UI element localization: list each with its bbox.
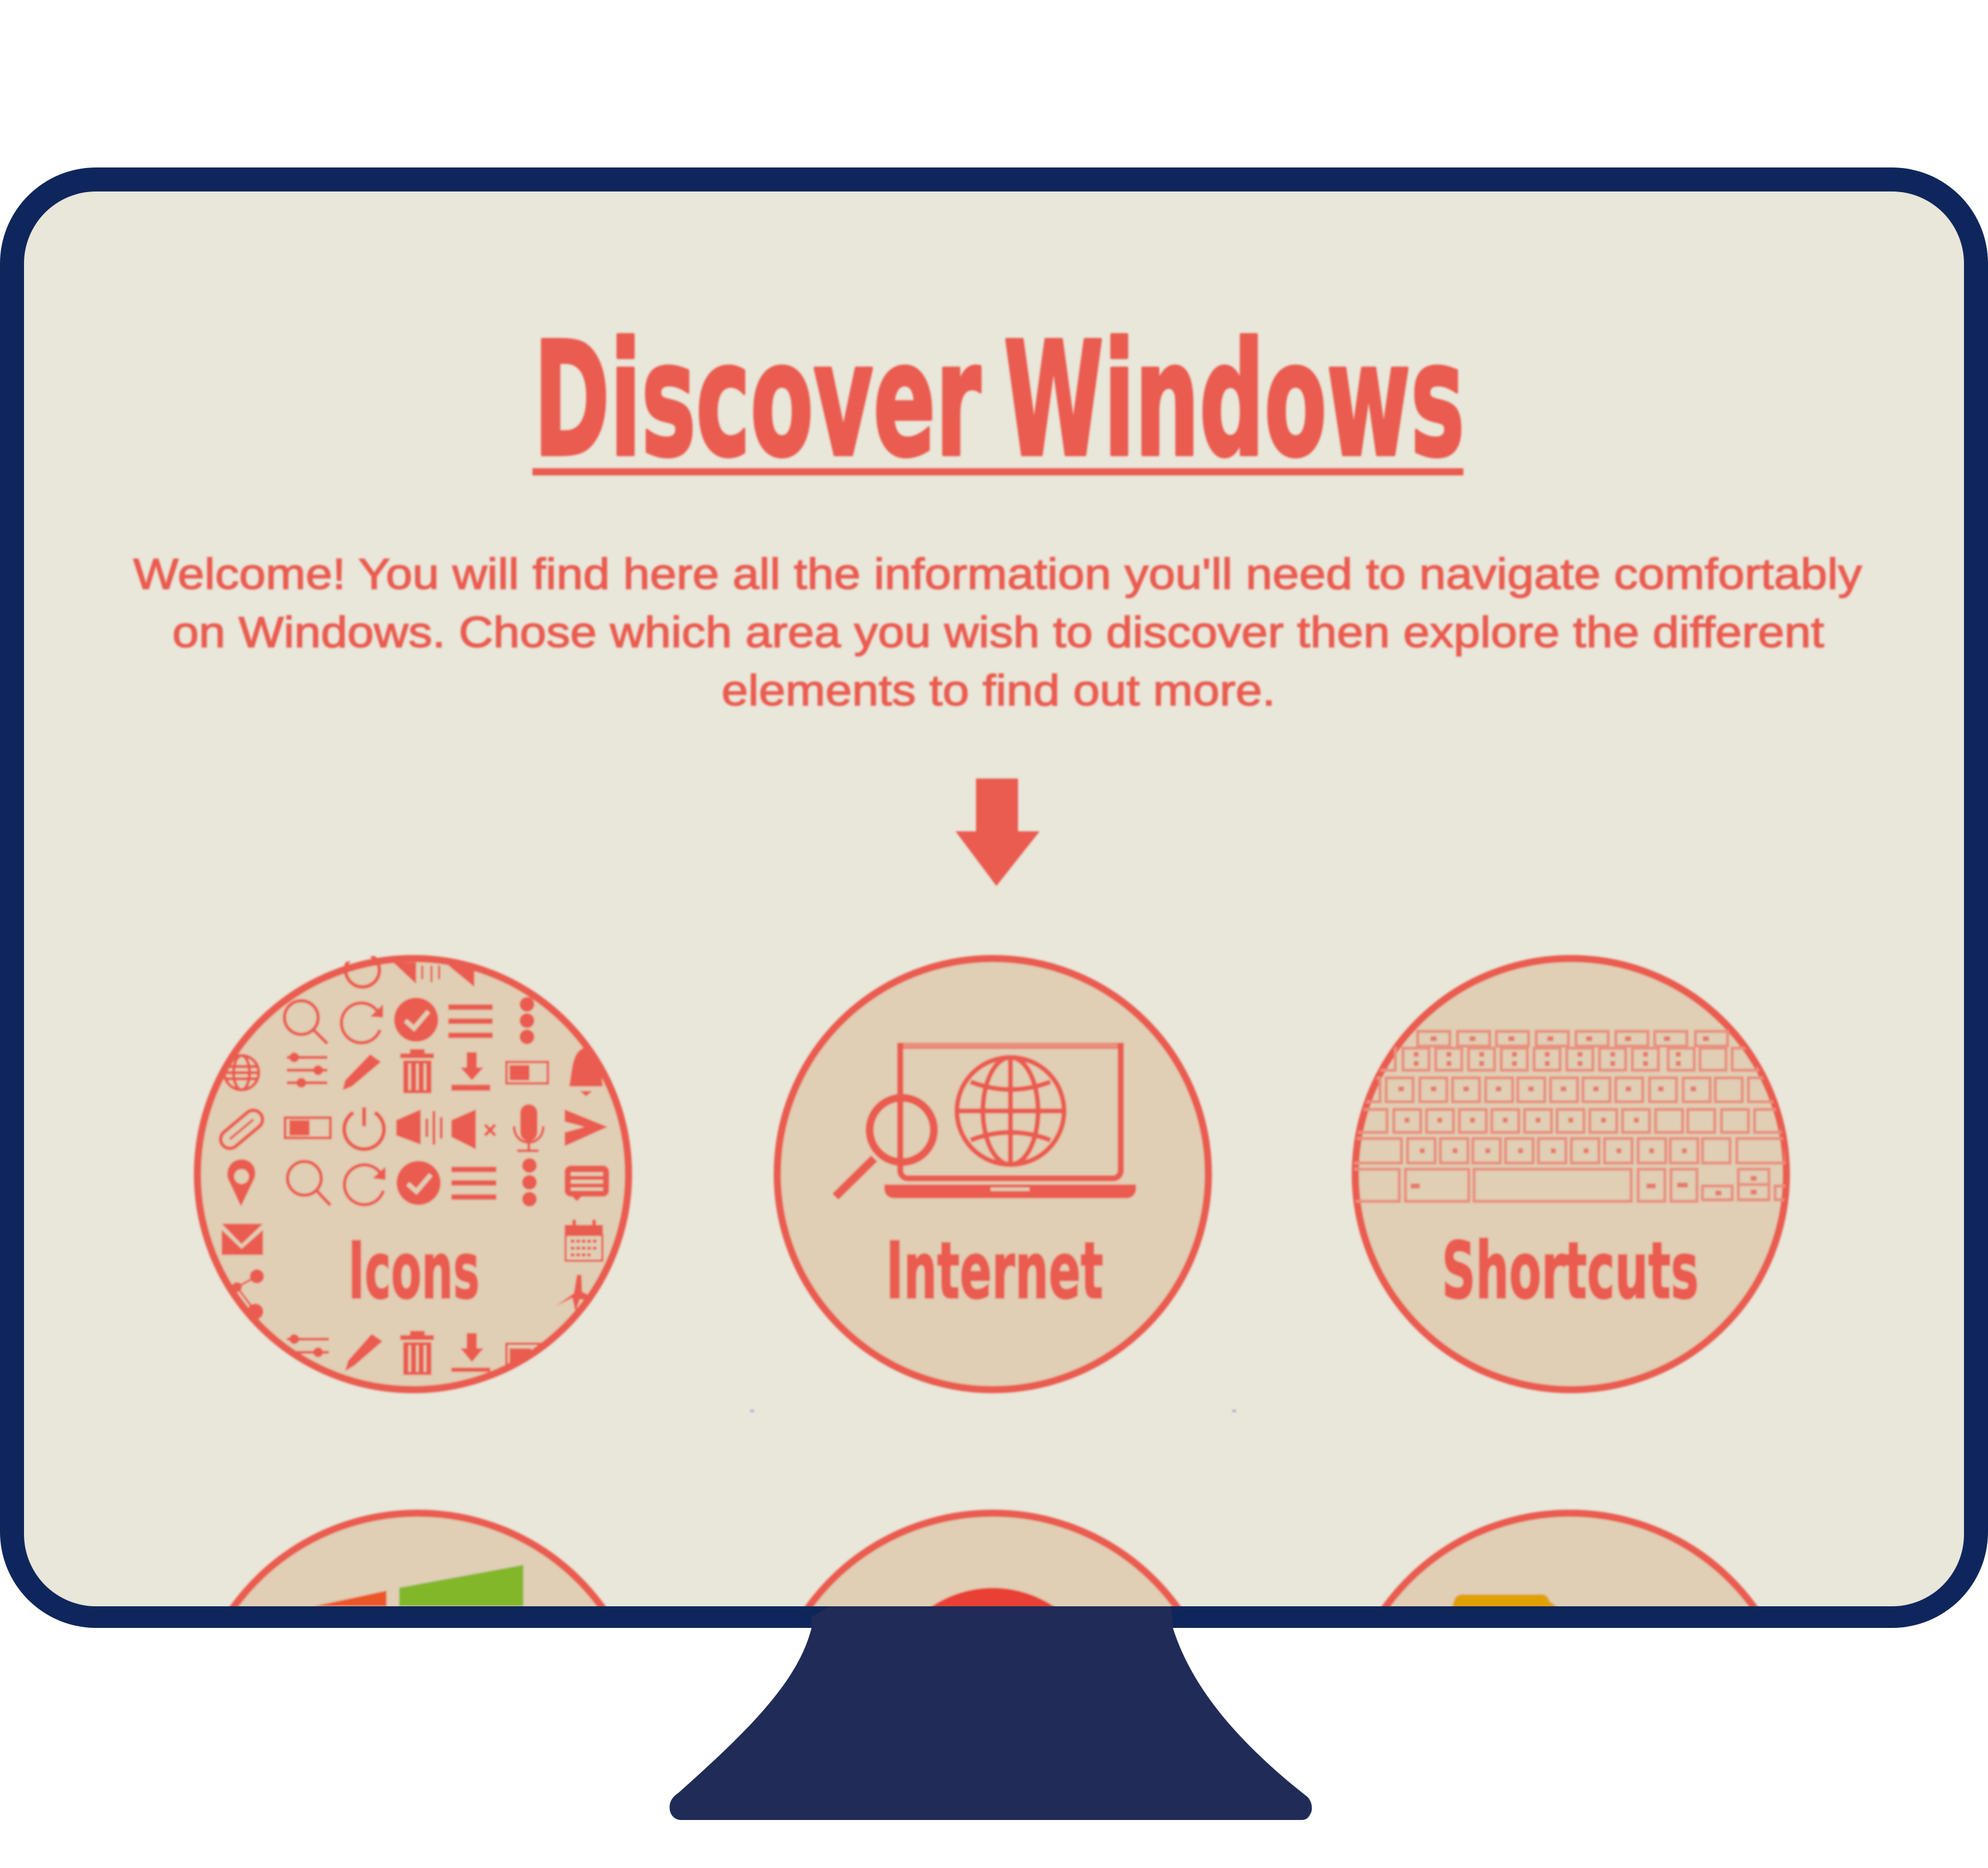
monitor frame [0, 167, 1988, 1628]
title: Discover [534, 309, 981, 492]
circle: icons [197, 953, 628, 1390]
icon: yellow shape [1451, 1594, 1559, 1609]
label: Internet: Internet [886, 1225, 1103, 1316]
circle: browser (clipped) [803, 1513, 1182, 1615]
stray marks [750, 1410, 1236, 1412]
circle: folder (clipped) [1381, 1513, 1759, 1615]
icon: red browser logo [921, 1588, 1065, 1615]
intro text: elements to find out more. [721, 667, 1276, 715]
title underline [532, 468, 1463, 475]
intro text: on Windows. Chose which area you wish to discover then explore the different [172, 609, 1824, 657]
circle: shortcuts [1351, 959, 1788, 1390]
circle: windows (clipped) [228, 1513, 607, 1615]
icon: laptop with globe and magnifier [833, 1043, 1136, 1200]
arrow pointing down [956, 779, 1040, 886]
intro text [133, 550, 1862, 715]
label: Shortcuts: Shortcuts [1442, 1225, 1699, 1316]
label: Icons: Icons [348, 1225, 480, 1316]
icon grid [217, 953, 609, 1375]
icon: windows logo [313, 1565, 523, 1606]
title [540, 331, 1463, 460]
icon: keyboard [1351, 1031, 1788, 1201]
monitor stand [670, 1606, 1312, 1820]
intro text: Welcome! You will find here all the information you'll need to navigate comfortably [133, 550, 1862, 598]
screen panel [24, 191, 1964, 1615]
title: Windows [1004, 309, 1465, 492]
circle: internet [777, 959, 1208, 1390]
